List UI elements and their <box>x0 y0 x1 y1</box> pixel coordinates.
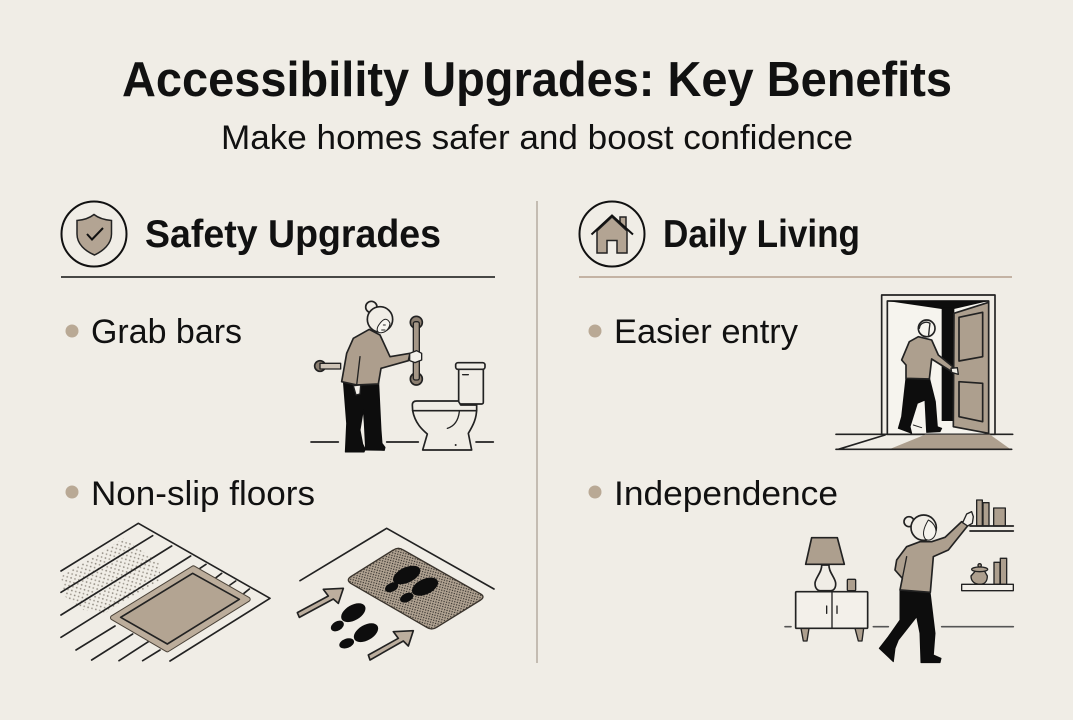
heading rule <box>579 276 1012 278</box>
panel: daily living <box>579 202 1013 663</box>
illustration: textured mat with footprints <box>297 528 494 660</box>
icon: shield <box>62 202 126 266</box>
bullet: easier entry: Easier entry <box>614 313 798 351</box>
bullet: grab bars: Grab bars <box>91 313 242 351</box>
title: Accessibility Upgrades: Key Benefits <box>122 53 952 107</box>
illustration: grab bars and toilet <box>311 301 493 452</box>
icon: house <box>580 202 644 266</box>
illustration: floor with mat <box>61 523 270 661</box>
heading: safety upgrades: Safety Upgrades <box>145 213 441 256</box>
illustration: person entering door <box>836 295 1013 449</box>
bullet: non-slip floors: Non-slip floors <box>91 475 315 513</box>
illustration: person reaching for a shelf <box>785 500 1013 663</box>
subtitle: Make homes safer and boost confidence <box>221 119 853 157</box>
center divider <box>536 201 538 663</box>
heading rule <box>61 276 495 278</box>
heading: daily living: Daily Living <box>663 213 860 256</box>
bullet: independence: Independence <box>614 475 838 513</box>
panel: safety upgrades <box>61 202 495 661</box>
